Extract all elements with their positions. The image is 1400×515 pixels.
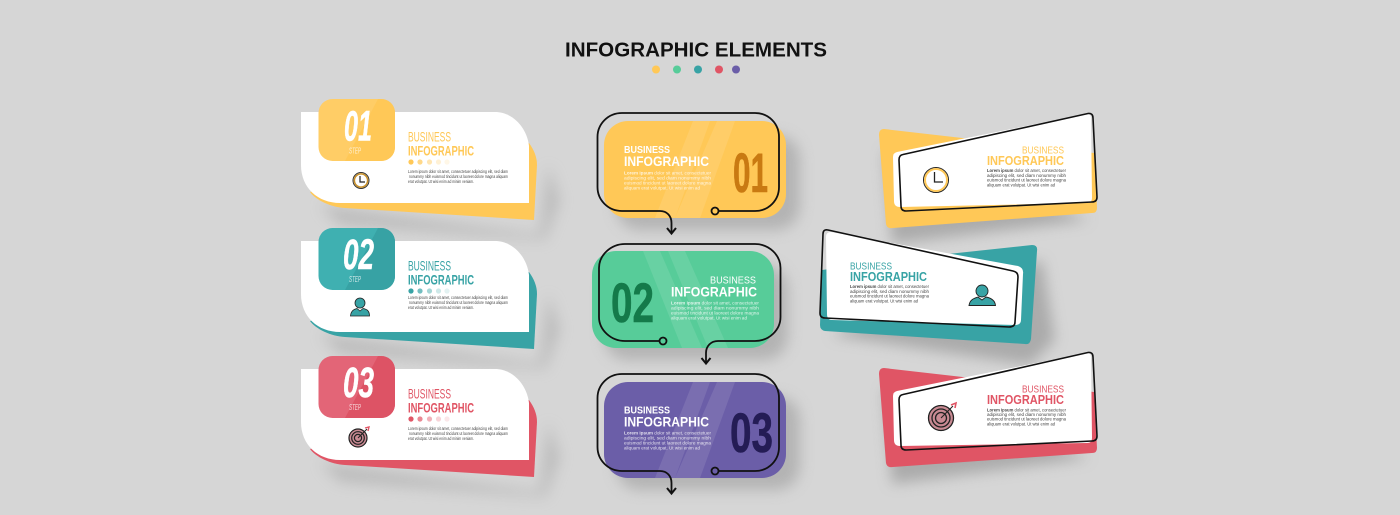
heading: BUSINESS (408, 130, 451, 144)
body text: Lorem ipsum dolor sit amet, consectetuer (987, 408, 1066, 412)
body text (408, 169, 508, 184)
title: INFOGRAPHIC ELEMENTS (565, 40, 827, 62)
body text: nonummy nibh euismod tincidunt ut laoreet dolore magna aliquam (409, 174, 508, 179)
body text: Lorem ipsum dolor sit amet, consectetuer (624, 430, 711, 436)
panel: left step 02 (301, 228, 560, 369)
outline (899, 113, 1097, 211)
icon: person (350, 298, 370, 316)
heading (850, 262, 928, 284)
heading: INFOGRAPHIC (987, 153, 1065, 168)
white card (893, 114, 1092, 207)
body text (408, 295, 508, 310)
body text (987, 168, 1066, 188)
heading: BUSINESS (1022, 146, 1064, 156)
icon: clock (353, 172, 369, 188)
panel: centre step 03 (598, 374, 800, 494)
body text: erat volutpat. Ut wisi enim ad minim veniam. (408, 305, 474, 310)
progress dots (408, 288, 450, 294)
body text: aliquam erat volutpat. Ut wisi enim ad (624, 186, 700, 190)
body text: erat volutpat. Ut wisi enim ad minim veniam. (408, 179, 474, 184)
body text: Lorem ipsum dolor sit amet, consectetuer (987, 168, 1066, 173)
heading: INFOGRAPHIC (408, 400, 474, 416)
heading: BUSINESS (1022, 384, 1064, 396)
body text (624, 170, 711, 190)
body text: nonummy nibh euismod tincidunt ut laoreet dolore magna aliquam (409, 431, 508, 436)
body text (624, 430, 711, 450)
heading (624, 144, 709, 169)
number: 02 (611, 271, 654, 334)
body text: Lorem ipsum dolor sit amet, consectetuer (671, 300, 759, 306)
body text: adipiscing elit, sed diam nonummy nibh (987, 412, 1066, 417)
heading: INFOGRAPHIC (624, 153, 709, 169)
title colour dots (652, 66, 740, 74)
outline (899, 352, 1097, 450)
icon: person (969, 285, 996, 306)
step badge: STEP (349, 403, 361, 412)
heading (408, 386, 474, 416)
number: 03 (730, 401, 773, 464)
connector arrow (599, 244, 780, 364)
heading: BUSINESS (624, 404, 670, 416)
connector arrow (598, 374, 779, 494)
heading (987, 146, 1065, 168)
panel: left step 01 (301, 99, 560, 240)
white card (826, 232, 1023, 325)
body text: Lorem ipsum dolor sit amet, consectetuer adipiscing elit, sed diam (408, 169, 508, 174)
body text (408, 426, 508, 441)
body text: Lorem ipsum dolor sit amet, consectetuer adipiscing elit, sed diam (408, 426, 508, 431)
heading: BUSINESS (624, 144, 670, 156)
panel: right step 01 (879, 113, 1097, 244)
body text (987, 408, 1066, 426)
body text: aliquam erat volutpat. Ut wisi enim ad (987, 422, 1055, 426)
step badge (318, 228, 395, 290)
white card (301, 241, 529, 332)
step badge: 02 (343, 231, 374, 279)
body text: euismod tincidunt ut laoreet dolore magna (987, 178, 1066, 182)
body text: adipiscing elit, sed diam nonummy nibh (671, 306, 759, 310)
heading: INFOGRAPHIC (987, 392, 1065, 407)
body text: Lorem ipsum dolor sit amet, consectetuer adipiscing elit, sed diam (408, 295, 508, 300)
step badge: STEP (349, 146, 361, 156)
heading: INFOGRAPHIC (408, 142, 474, 158)
panel: right step 02 (820, 230, 1055, 365)
connector arrow (598, 113, 779, 234)
heading: BUSINESS (408, 258, 451, 274)
body text: euismod tincidunt ut laoreet dolore magna (850, 294, 929, 298)
heading (408, 258, 474, 288)
heading: BUSINESS (408, 386, 451, 402)
white card (301, 112, 529, 203)
body text: erat volutpat. Ut wisi enim ad minim veniam. (408, 436, 474, 441)
heading: INFOGRAPHIC (850, 269, 928, 284)
body text: adipiscing elit, sed diam nonummy nibh (624, 176, 711, 180)
panel: centre step 02 (592, 244, 788, 364)
body text: euismod tincidunt ut laoreet dolore magna (624, 440, 711, 446)
step badge: STEP (349, 275, 361, 284)
body text: adipiscing elit, sed diam nonummy nibh (624, 436, 711, 440)
body text: euismod tincidunt ut laoreet dolore magna (671, 310, 759, 316)
outline (820, 230, 1018, 327)
body text (850, 284, 929, 304)
panel: right step 03 (879, 352, 1097, 484)
progress dots (408, 416, 450, 422)
heading: INFOGRAPHIC (671, 284, 757, 300)
number: 01 (733, 141, 768, 204)
body text: nonummy nibh euismod tincidunt ut laoreet dolore magna aliquam (409, 300, 508, 305)
step badge (318, 356, 395, 418)
body text: aliquam erat volutpat. Ut wisi enim ad (671, 316, 747, 320)
progress dots (408, 159, 450, 165)
step badge: 01 (344, 102, 372, 150)
step badge: 03 (343, 359, 374, 407)
icon: target (349, 427, 369, 447)
heading (987, 384, 1065, 407)
body text (671, 300, 759, 320)
heading: BUSINESS (850, 262, 892, 272)
heading: INFOGRAPHIC (624, 414, 709, 430)
heading (671, 274, 757, 300)
icon: clock (924, 168, 948, 192)
step badge (318, 99, 395, 161)
heading: INFOGRAPHIC (408, 272, 474, 288)
body text: aliquam erat volutpat. Ut wisi enim ad (987, 182, 1055, 188)
body text: Lorem ipsum dolor sit amet, consectetuer (624, 170, 711, 176)
body text: adipiscing elit, sed diam nonummy nibh (850, 289, 929, 294)
panel: centre step 01 (598, 113, 800, 234)
icon: target (928, 403, 956, 430)
heading: BUSINESS (710, 274, 756, 286)
body text: euismod tincidunt ut laoreet dolore magna (987, 416, 1066, 422)
heading (408, 130, 474, 158)
body text: aliquam erat volutpat. Ut wisi enim ad (624, 446, 700, 450)
body text: adipiscing elit, sed diam nonummy nibh (987, 173, 1066, 178)
white card (893, 353, 1092, 446)
body text: euismod tincidunt ut laoreet dolore magna (624, 180, 711, 186)
body text: aliquam erat volutpat. Ut wisi enim ad (850, 298, 918, 304)
heading (624, 404, 709, 430)
body text: Lorem ipsum dolor sit amet, consectetuer (850, 284, 929, 289)
white card (301, 369, 529, 460)
panel: left step 03 (301, 356, 560, 497)
